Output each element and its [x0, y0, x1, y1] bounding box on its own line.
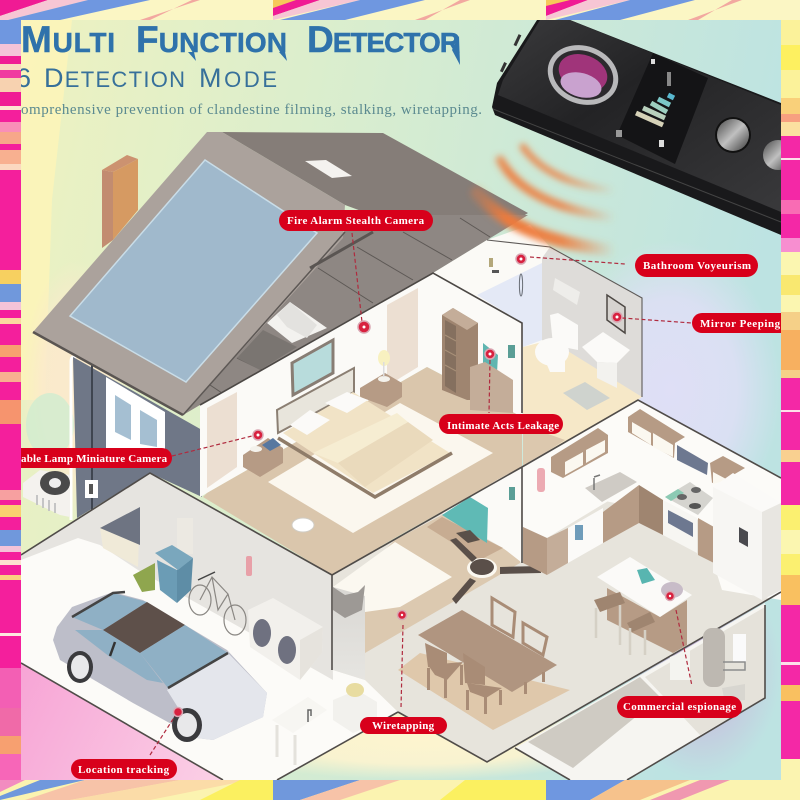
- mirror: [292, 340, 333, 395]
- bed: [277, 368, 452, 497]
- callout: commercial espionage: Commercial espionage: [623, 701, 737, 713]
- washer and dryer: [248, 598, 323, 680]
- thermostat: [509, 487, 515, 500]
- dresser with tv: [470, 343, 515, 413]
- callout: bathroom voyeurism: [516, 254, 758, 277]
- laundry column: [333, 587, 365, 680]
- bath mat: [563, 382, 610, 410]
- lens: [539, 35, 627, 115]
- fridge: [713, 473, 781, 600]
- device: handheld detector: [492, 20, 793, 235]
- basket: [133, 563, 155, 592]
- utility sink and cabinet: [272, 683, 377, 765]
- callout: commercial espionage: [617, 592, 742, 718]
- towel: [553, 278, 580, 305]
- bedroom door left: [207, 392, 237, 488]
- ceiling fan: [450, 538, 541, 604]
- callout: intimate acts leakage: [439, 349, 563, 434]
- main floor: living room, dining, kitchen: [332, 400, 781, 780]
- callout: mirror peeping: [612, 312, 792, 333]
- bathroom: [433, 225, 642, 467]
- callout: table lamp miniature camera: [5, 430, 263, 468]
- display screen: [616, 53, 708, 164]
- callout: table lamp miniature camera: able Lamp Miniature Camera: [21, 453, 168, 465]
- sink: [582, 332, 630, 388]
- title: [23, 26, 460, 65]
- utility room: [515, 603, 765, 780]
- roof: [33, 132, 528, 415]
- garage: [21, 473, 398, 780]
- rug: [268, 403, 493, 533]
- tv: [442, 497, 488, 543]
- callout: location tracking: [71, 708, 182, 779]
- callout: fire alarm stealth camera: [279, 210, 433, 333]
- callout: intimate acts leakage: Intimate Acts Leakage: [447, 420, 560, 432]
- callout: wiretapping: Wiretapping: [372, 720, 435, 732]
- bedroom: [200, 273, 522, 575]
- tv wall: [442, 467, 521, 562]
- tagline: omprehensive prevention of clandestine filming, stalking, wiretapping.: [21, 102, 482, 118]
- bicycle: [189, 572, 246, 635]
- subtitle: 6: [16, 63, 31, 93]
- control buttons: [715, 117, 793, 170]
- kitchen island: [594, 557, 692, 655]
- extinguisher: [246, 556, 252, 576]
- title: DETECTOR: [307, 19, 460, 60]
- bedroom door back: [387, 288, 418, 387]
- signal waves: [477, 147, 610, 250]
- callout: fire alarm stealth camera: Fire Alarm Stealth Camera: [287, 215, 425, 227]
- title: FUNCTION: [136, 19, 287, 60]
- garage door: [100, 507, 140, 567]
- dining table: [418, 610, 557, 692]
- tv stand: [427, 517, 503, 560]
- callout: bathroom voyeurism: Bathroom Voyeurism: [643, 260, 752, 272]
- bookshelf: [442, 308, 478, 400]
- living tan floor: [365, 515, 520, 653]
- kitchen counter and cabinets: [523, 468, 713, 575]
- nightstand front: [243, 438, 283, 477]
- door: [177, 518, 193, 554]
- callout: wiretapping: [360, 610, 447, 734]
- subtitle: [21, 68, 276, 88]
- callout: location tracking: Location tracking: [78, 764, 170, 776]
- nightstand back: [360, 350, 402, 407]
- wall mirror: [607, 295, 625, 333]
- subtitle: MODE: [199, 63, 277, 93]
- wall cabinets and microwave: [551, 409, 745, 484]
- title: MULTI: [21, 19, 115, 60]
- dining rug: [398, 653, 570, 730]
- car: [53, 592, 267, 742]
- toilet: [535, 313, 578, 372]
- front chairs: [425, 643, 545, 714]
- chimney: [102, 155, 138, 248]
- house exterior: wall, window, air conditioner: [23, 357, 202, 520]
- robot vacuum: [292, 518, 314, 532]
- living white rug: [334, 542, 452, 612]
- bin: [155, 545, 193, 603]
- callout: mirror peeping: Mirror Peeping: [700, 318, 781, 330]
- back chairs: [492, 598, 547, 655]
- subtitle: DETECTION: [44, 63, 185, 93]
